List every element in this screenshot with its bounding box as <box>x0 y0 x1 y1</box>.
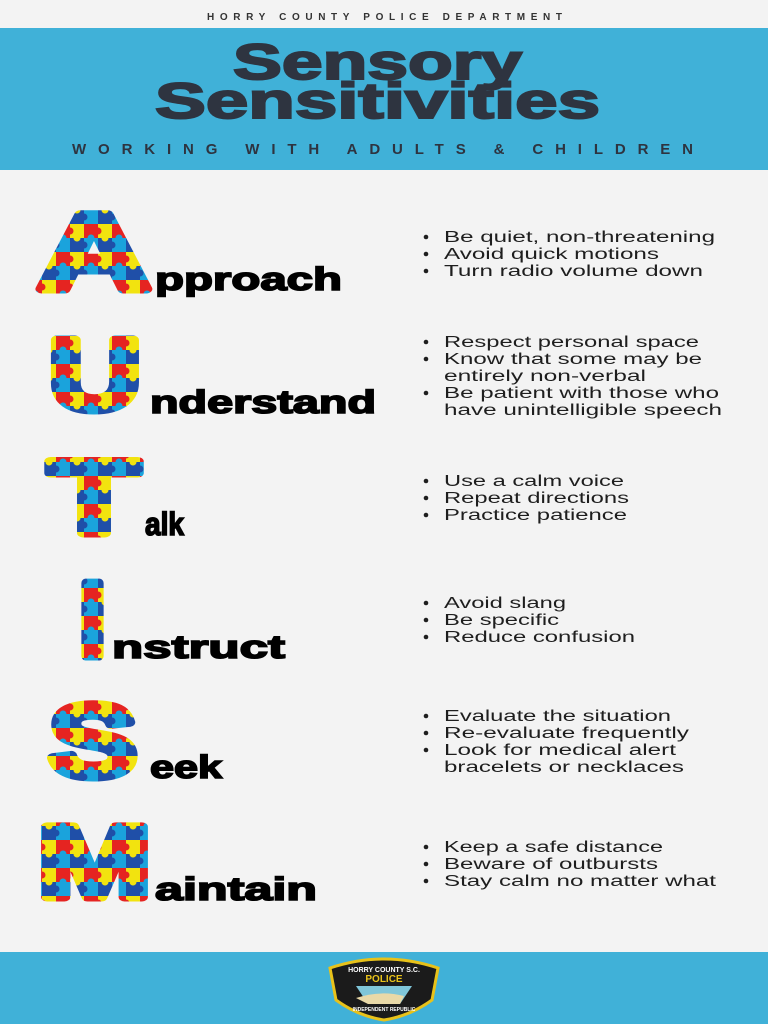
row: Seek: Evaluate the situation <box>444 708 671 725</box>
header band <box>0 28 768 170</box>
row: Maintain: Beware of outbursts <box>444 856 658 873</box>
icon: police badge: POLICE <box>365 974 403 985</box>
row: Understand: nderstand <box>150 384 376 420</box>
row: Understand: entirely non-verbal <box>444 368 646 385</box>
row: Understand: U <box>49 319 141 431</box>
row: Maintain: Stay calm no matter what <box>444 873 717 890</box>
row: Understand: Be patient with those who <box>444 385 719 402</box>
row: Instruct: I <box>79 561 106 679</box>
row: Instruct: nstruct <box>112 629 286 665</box>
icon: police badge <box>330 959 438 1020</box>
title: Sensitivities <box>155 73 600 129</box>
row: Seek: eek <box>150 749 222 785</box>
row: Understand: Respect personal space <box>444 334 699 351</box>
title <box>155 34 600 129</box>
footer band <box>0 952 768 1024</box>
row: Seek <box>49 684 689 798</box>
row: Talk <box>49 440 629 556</box>
row: Approach: pproach <box>155 261 342 297</box>
icon: police badge: HORRY COUNTY S.C. <box>348 967 420 974</box>
title: Sensory <box>233 34 522 90</box>
row: Talk: alk <box>145 506 184 542</box>
row: Understand: Know that some may be <box>444 351 702 368</box>
row: Talk: Repeat directions <box>444 490 629 507</box>
row: Seek: bracelets or necklaces <box>444 759 684 776</box>
row: Seek: Re-evaluate frequently <box>444 725 689 742</box>
row: Approach: A <box>38 191 150 312</box>
row: Understand <box>49 319 722 431</box>
row: Approach <box>38 191 715 312</box>
row: Approach: Turn radio volume down <box>444 263 703 280</box>
row: Approach: Avoid quick motions <box>444 246 659 263</box>
top label: HORRY COUNTY POLICE DEPARTMENT <box>207 12 562 23</box>
row: Instruct: Be specific <box>444 612 559 629</box>
row: Talk: Use a calm voice <box>444 473 624 490</box>
icon: police badge: INDEPENDENT REPUBLIC <box>353 1007 416 1013</box>
row: Instruct: Reduce confusion <box>444 629 635 646</box>
row: Approach: Be quiet, non-threatening <box>444 229 715 246</box>
row: Seek: Look for medical alert <box>444 742 677 759</box>
row: Talk: Practice patience <box>444 507 627 524</box>
row: Seek: S <box>49 684 137 798</box>
row: Instruct: Avoid slang <box>444 595 566 612</box>
row: Maintain <box>38 805 717 919</box>
row: Talk: T <box>49 440 139 556</box>
row: Instruct <box>79 561 635 679</box>
subtitle: WORKING WITH ADULTS & CHILDREN <box>72 141 693 158</box>
row: Maintain: M <box>38 805 151 919</box>
row: Maintain: Keep a safe distance <box>444 839 663 856</box>
row: Maintain: aintain <box>155 871 317 907</box>
row: Understand: have unintelligible speech <box>444 402 722 419</box>
